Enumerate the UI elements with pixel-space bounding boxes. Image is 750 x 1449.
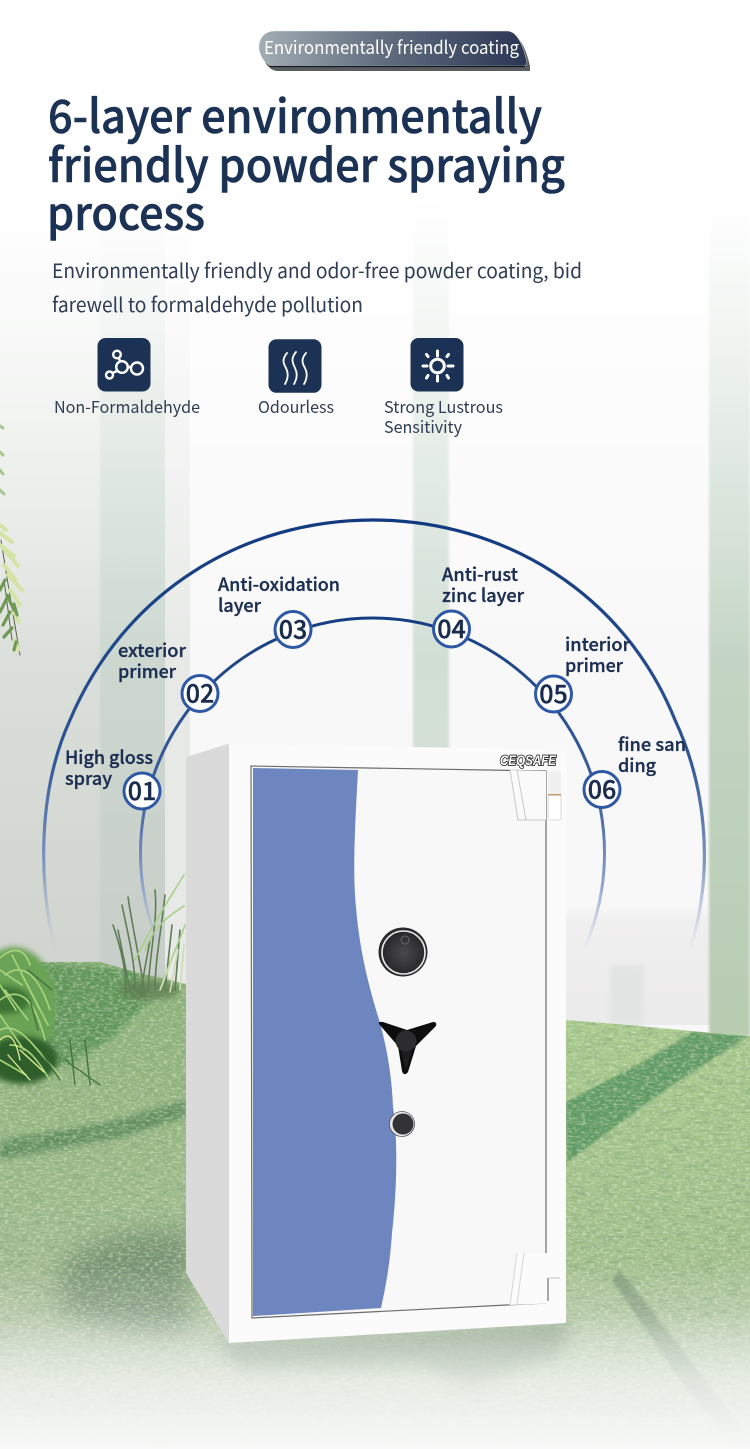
safe front (229, 744, 566, 1343)
node 06 (584, 731, 686, 808)
feature: Odourless (258, 339, 334, 418)
node 01: 01 (128, 772, 156, 808)
three-spoke handle (379, 1022, 436, 1074)
wall and pillars (0, 100, 750, 1036)
inner arc (140, 618, 604, 1088)
node 05: interior (565, 631, 631, 657)
node 04: zinc layer (442, 582, 525, 608)
node 01: spray (65, 765, 112, 791)
feature: Strong Lustrous Sensitivity: Strong Lustrous (384, 394, 503, 418)
node 06: 06 (588, 770, 616, 806)
node 05: 05 (539, 675, 568, 711)
round key cover (390, 1112, 414, 1136)
door (251, 766, 546, 1318)
title: process (47, 178, 205, 244)
node 01: High gloss (65, 744, 153, 770)
bottom hinge (510, 1253, 561, 1305)
node 03: Anti-oxidation (218, 571, 340, 597)
bottom fog (0, 1265, 750, 1449)
node 03 (218, 571, 340, 648)
description: farewell to formaldehyde pollution (52, 289, 363, 318)
node 03: 03 (279, 610, 307, 646)
node 06: ding (618, 752, 657, 778)
node 06: fine san (618, 731, 686, 757)
icon: molecule (98, 338, 150, 392)
bush at left (0, 947, 100, 1085)
feature: Non-Formaldehyde (54, 338, 200, 418)
node 02: 02 (186, 674, 214, 710)
safe (186, 744, 566, 1343)
description (52, 255, 582, 318)
lawn (0, 950, 750, 1449)
ground shadow under safe (215, 1322, 570, 1390)
node 05 (536, 631, 631, 712)
willow branch (0, 426, 22, 655)
node 02: exterior (118, 637, 187, 663)
description: Environmentally friendly and odor-free powder coating, bid (52, 255, 582, 284)
node 02: primer (118, 658, 177, 684)
title: 6-layer environmentally (48, 81, 542, 147)
node 01 (65, 744, 160, 809)
outer arc (44, 520, 704, 950)
feature: Non-Formaldehyde: Non-Formaldehyde (54, 394, 200, 418)
tag: Environmentally friendly coating: Environmentally friendly coating (264, 34, 519, 60)
icon: sun (410, 338, 464, 392)
blue door panel (253, 768, 396, 1316)
top hinge (510, 770, 561, 820)
safe side panel (186, 744, 229, 1343)
feature: Strong Lustrous Sensitivity (384, 338, 503, 438)
title (47, 81, 565, 244)
tall grass tuft (113, 875, 185, 1000)
feature: Odourless: Odourless (258, 394, 334, 418)
node 04: Anti-rust (442, 561, 518, 587)
node 04: 04 (437, 610, 466, 646)
dial lock (378, 928, 428, 976)
node 04 (434, 561, 525, 647)
node 02 (118, 637, 218, 712)
node 05: primer (565, 652, 624, 678)
top white fade (0, 0, 750, 660)
tag: Environmentally friendly coating (259, 31, 530, 71)
tree shadow at lower right (612, 1270, 750, 1449)
node 03: layer (218, 592, 262, 618)
title: friendly powder spraying (48, 130, 565, 196)
feature: Strong Lustrous Sensitivity: Sensitivity (384, 414, 462, 438)
icon: odour waves (268, 339, 322, 393)
brand: CEQSAFE: CEQSAFE (500, 752, 557, 768)
